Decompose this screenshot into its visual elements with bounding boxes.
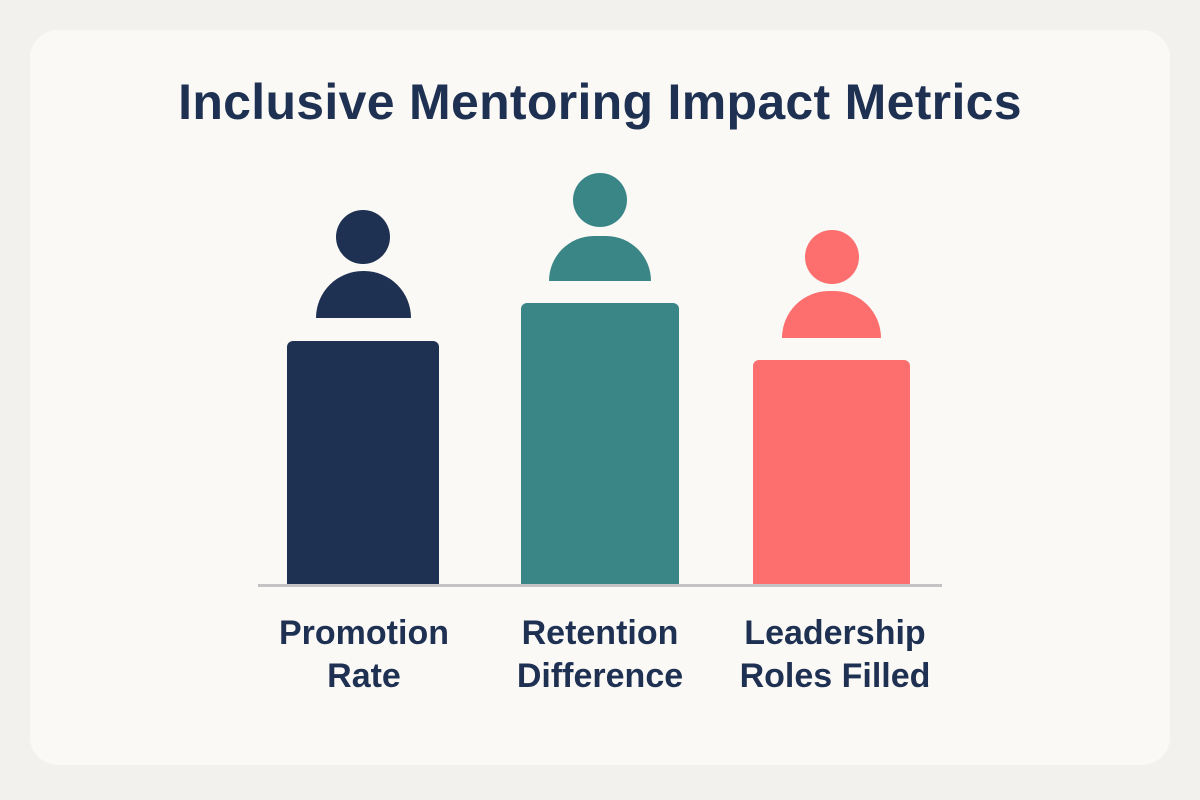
bar: promotion rate xyxy=(287,341,439,586)
label: retention difference: Difference xyxy=(517,657,683,695)
icon: person coral head xyxy=(805,230,859,284)
label: retention difference: Retention xyxy=(522,614,678,652)
label: retention difference xyxy=(517,614,683,695)
baseline axis xyxy=(258,584,942,587)
icon: person teal head xyxy=(573,173,627,227)
icon: person navy head xyxy=(336,210,390,264)
label: promotion rate: Promotion xyxy=(279,614,449,652)
label: promotion rate xyxy=(279,614,449,695)
label: leadership roles filled: Leadership xyxy=(744,614,926,652)
bar group: promotion rate xyxy=(287,210,439,584)
icon: person teal shoulders xyxy=(549,236,651,281)
icon: person coral shoulders xyxy=(782,291,881,338)
icon: person navy shoulders xyxy=(316,271,411,318)
bar: retention difference xyxy=(521,303,679,586)
title: Inclusive Mentoring Impact Metrics xyxy=(178,74,1022,130)
label: leadership roles filled xyxy=(740,614,930,695)
label: leadership roles filled: Roles Filled xyxy=(740,657,930,695)
bar group: leadership roles filled xyxy=(753,230,910,584)
label: promotion rate: Rate xyxy=(327,657,401,695)
bar: leadership roles filled xyxy=(753,360,910,586)
bar group: retention difference xyxy=(521,173,679,584)
